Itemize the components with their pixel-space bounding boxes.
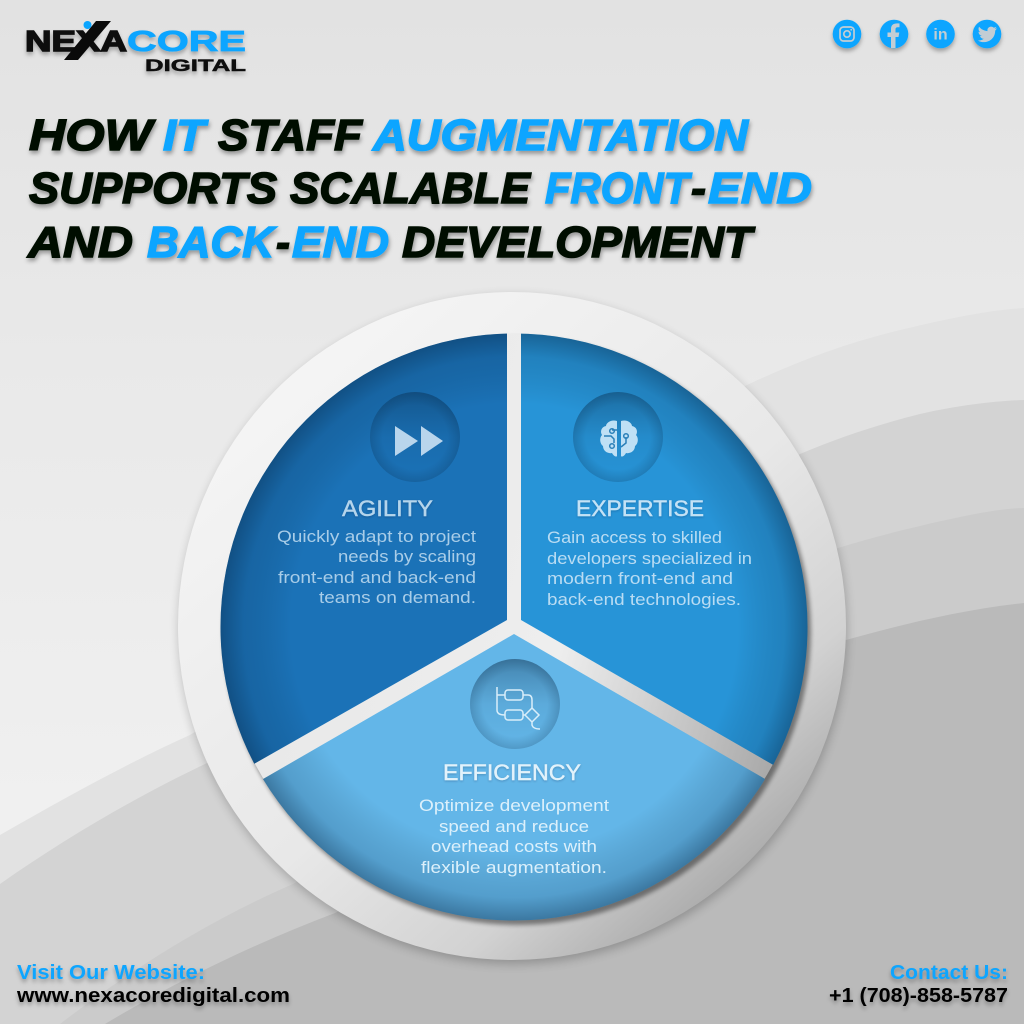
logo: NexaCore Digital: NEXA: [25, 26, 127, 58]
text: agility description: [277, 527, 476, 607]
icon well: fast forward: [370, 392, 460, 482]
panel: efficiency: [263, 634, 765, 920]
title: SUPPORTS: [29, 164, 277, 213]
logo: NexaCore Digital: DIGITAL: [145, 56, 246, 75]
icon: instagram: [833, 20, 861, 48]
heading: expertise: EXPERTISE: [576, 496, 704, 521]
heading: agility: AGILITY: [342, 496, 433, 521]
text: efficiency description: overhead costs with: [431, 837, 597, 856]
icon: facebook: [880, 20, 908, 48]
title: [27, 111, 812, 267]
title: SCALABLE: [290, 164, 532, 213]
title: END: [708, 164, 812, 213]
title: AND: [27, 218, 133, 267]
logo: NexaCore Digital: CORE: [127, 26, 246, 58]
text: expertise description: Gain access to skilled: [547, 528, 722, 547]
icon: twitter: [973, 20, 1001, 48]
icon well: brain: [573, 392, 663, 482]
icon: linkedin: in: [933, 26, 948, 44]
title: -: [691, 164, 706, 213]
icon well: flow chart: [470, 659, 560, 749]
title: IT: [163, 111, 208, 160]
outer ring: [178, 292, 847, 964]
text: expertise description: back-end technologies.: [547, 590, 741, 609]
title: HOW: [29, 111, 156, 160]
title: AUGMENTATION: [372, 111, 749, 160]
icon: linkedin: [926, 20, 955, 48]
text: agility description: teams on demand.: [319, 588, 476, 607]
title: END: [292, 218, 389, 267]
text: efficiency description: speed and reduce: [439, 817, 589, 836]
panel: expertise: [521, 334, 808, 765]
text: agility description: Quickly adapt to project: [277, 527, 476, 546]
footer: contact: +1 (708)-858-5787: [829, 985, 1008, 1007]
circular diagram: [178, 292, 850, 964]
text: efficiency description: [419, 796, 609, 877]
footer: contact: Contact Us:: [890, 962, 1008, 984]
text: expertise description: developers specialized in: [547, 549, 752, 568]
footer: website: [16, 962, 290, 1007]
title: STAFF: [218, 111, 363, 160]
social icons: [833, 20, 1001, 48]
logo: NexaCore Digital: [25, 21, 246, 75]
panel: agility: [220, 334, 507, 764]
title: FRONT: [545, 164, 692, 213]
text: agility description: needs by scaling: [338, 547, 476, 566]
title: BACK: [147, 218, 277, 267]
heading: efficiency: EFFICIENCY: [443, 760, 581, 785]
footer: website: Visit Our Website:: [17, 962, 205, 984]
footer: website: www.nexacoredigital.com: [16, 985, 290, 1007]
text: expertise description: [547, 528, 752, 609]
title: DEVELOPMENT: [402, 218, 755, 267]
title: -: [276, 218, 290, 267]
text: efficiency description: Optimize development: [419, 796, 609, 815]
text: agility description: front-end and back-end: [278, 568, 476, 587]
text: efficiency description: flexible augmentation.: [421, 858, 607, 877]
text: expertise description: modern front-end and: [547, 569, 733, 588]
footer: contact: [829, 962, 1008, 1007]
